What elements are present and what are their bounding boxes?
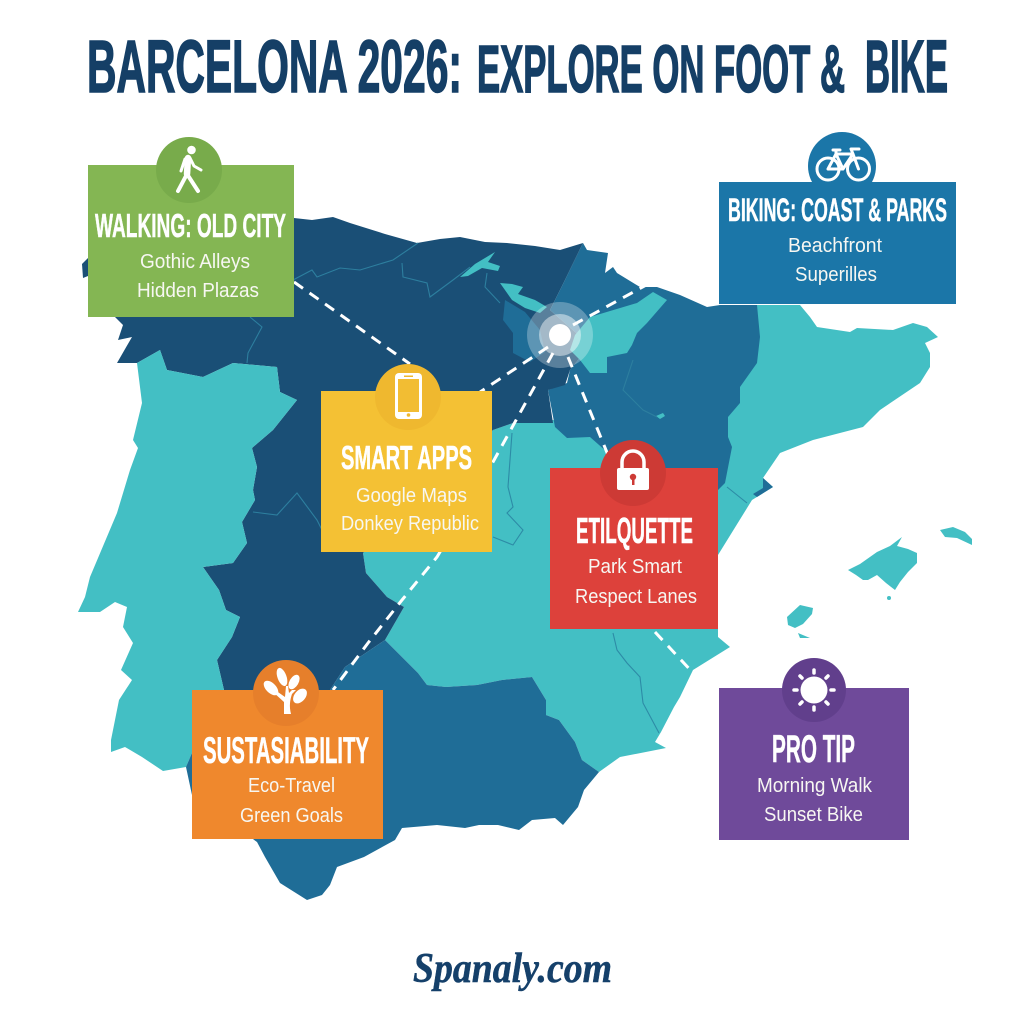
panel: walking: [88, 137, 294, 317]
region: Aragon lake: [656, 413, 665, 419]
region: Portugal teal: [78, 350, 297, 771]
text: smart apps items: Google Maps: [356, 485, 467, 507]
text: biking items: [788, 235, 882, 286]
heading: smart apps: SMART APPS: [341, 439, 472, 476]
region: eastern and central teal: [363, 305, 938, 772]
text: etiquette items: [575, 556, 697, 608]
text: walking items: [137, 251, 259, 302]
region: north-west and central dark blue: [88, 217, 590, 690]
marker: Barcelona location: [527, 302, 593, 368]
text: biking items: Superilles: [795, 264, 877, 286]
text: etiquette items: Respect Lanes: [575, 586, 697, 608]
region: Galicia islet: [82, 258, 88, 278]
region: north-east blue: [548, 243, 760, 490]
text: etiquette items: Park Smart: [588, 556, 682, 578]
text: walking items: Hidden Plazas: [137, 280, 259, 302]
dashed connector lines: [294, 282, 695, 690]
heading: walking: WALKING: OLD CITY: [95, 207, 286, 244]
text: sustainability items: Green Goals: [240, 805, 343, 827]
Balearic islands: [787, 527, 972, 638]
region: teal blob beside marker: [570, 292, 667, 373]
title: BARCELONA 2026:: [87, 25, 462, 108]
map of Spain and Portugal: [78, 217, 972, 900]
text: sustainability items: [240, 775, 343, 827]
panel: biking: [719, 132, 956, 304]
icon: tree: [261, 667, 310, 714]
heading: sustainability: SUSTASIABILITY: [203, 730, 369, 771]
thin regional borders: [247, 243, 747, 733]
region: lighter blue around marker: [503, 300, 545, 362]
region: teal lake shape: [500, 283, 547, 313]
region: Andalusia blue: [186, 640, 599, 900]
heading: pro tip: PRO TIP: [772, 728, 855, 771]
icon: sun: [794, 670, 834, 710]
icon: smartphone: [395, 373, 422, 419]
panel: sustainability: [192, 660, 383, 839]
region: teal sliver: [460, 252, 500, 277]
panel: etiquette: [550, 440, 718, 629]
icon: bicycle: [817, 149, 870, 180]
icon: walker: [178, 146, 201, 191]
footer brand: Spanaly.com: [413, 946, 612, 992]
panel: smart apps: [321, 364, 492, 552]
text: walking items: Gothic Alleys: [140, 251, 250, 273]
icon: padlock: [617, 451, 649, 490]
heading: etiquette: ETILQUETTE: [576, 510, 693, 551]
text: pro tip items: Sunset Bike: [764, 804, 863, 826]
text: smart apps items: [341, 485, 479, 535]
text: pro tip items: Morning Walk: [757, 775, 873, 797]
region: Ebro delta: [753, 478, 773, 497]
text: pro tip items: [757, 775, 873, 826]
text: smart apps items: Donkey Republic: [341, 513, 479, 535]
text: biking items: Beachfront: [788, 235, 882, 257]
text: sustainability items: Eco-Travel: [248, 775, 335, 797]
panel: pro tip: [719, 658, 909, 840]
